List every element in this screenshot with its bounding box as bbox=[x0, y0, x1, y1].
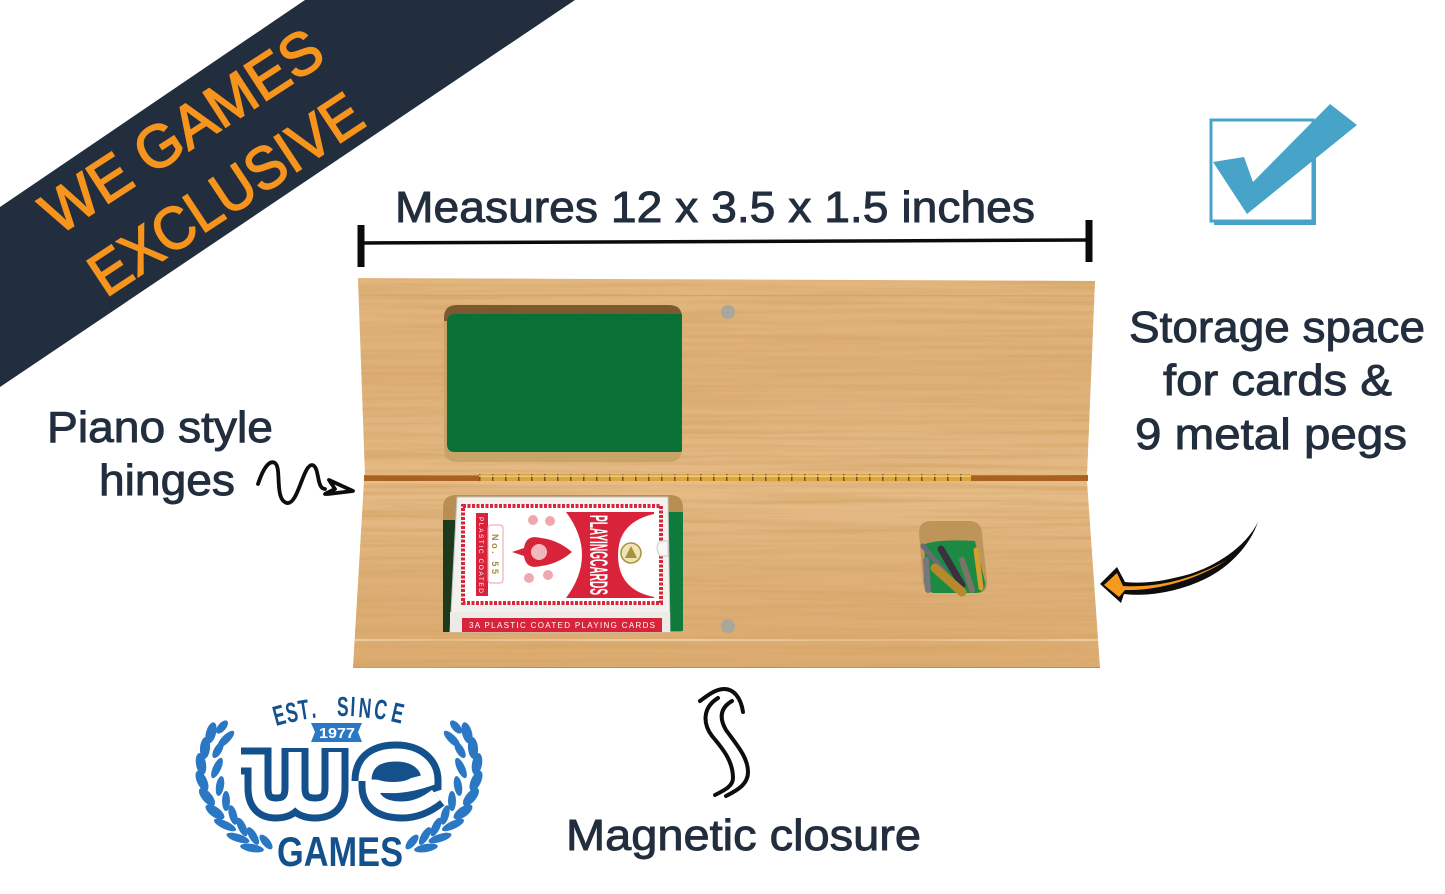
playing cards deck: 3A PLASTIC COATED PLAYING CARDS bbox=[469, 621, 655, 630]
logo arc text: . bbox=[309, 692, 317, 724]
arrow: orange curved to peg storage bbox=[1100, 522, 1258, 603]
logo arc text: E bbox=[269, 699, 289, 732]
arrow: magnetic closure squiggle bbox=[700, 689, 748, 796]
label: storage space: Storage space bbox=[1129, 303, 1425, 352]
arrow: squiggle to hinge bbox=[258, 462, 353, 503]
label: storage space: for cards & bbox=[1163, 356, 1392, 405]
dimension line bbox=[361, 220, 1089, 267]
laurel right bbox=[403, 718, 485, 854]
logo arc text: T bbox=[296, 693, 311, 726]
playing cards deck: PLAYINGCARDS bbox=[584, 515, 612, 595]
label: storage space: 9 metal pegs bbox=[1135, 410, 1407, 459]
1977 ribbon: 1977 bbox=[319, 725, 355, 742]
playing cards deck: No. 55 bbox=[490, 534, 500, 574]
logo arc text: N bbox=[357, 692, 373, 724]
peg recess bbox=[919, 521, 987, 593]
banner: WE Games Exclusive: WE GAMES bbox=[29, 15, 335, 247]
logo arc text: C bbox=[372, 693, 389, 726]
dimension heading: Measures 12 x 3.5 x 1.5 inches bbox=[395, 183, 1035, 232]
logo arc text: I bbox=[350, 691, 356, 722]
label: storage space bbox=[1129, 303, 1425, 459]
label: piano style hinges: hinges bbox=[99, 456, 235, 505]
label: piano style hinges: Piano style bbox=[47, 403, 273, 452]
label: piano style hinges bbox=[47, 403, 273, 505]
playing cards deck bbox=[450, 497, 670, 632]
card recess bbox=[443, 495, 683, 632]
magnet lid bbox=[721, 305, 735, 319]
banner: WE Games Exclusive: EXCLUSIVE bbox=[76, 80, 375, 309]
box base bbox=[353, 481, 1100, 668]
laurel left bbox=[193, 718, 275, 854]
hinge bbox=[364, 474, 1088, 481]
playing cards deck: PLASTIC COATED bbox=[477, 517, 484, 593]
1977 ribbon bbox=[311, 723, 362, 742]
label: magnetic closure: Magnetic closure bbox=[566, 811, 921, 860]
icon: blue check mark in box bbox=[1211, 104, 1357, 225]
logo arc text: E bbox=[389, 696, 407, 729]
logo arc text: S bbox=[283, 696, 301, 729]
logo: WE Games bbox=[193, 691, 485, 875]
cribbage box photo bbox=[350, 275, 1105, 670]
logo arc text: S bbox=[337, 691, 349, 722]
GAMES text: GAMES bbox=[277, 828, 403, 875]
banner: WE Games Exclusive bbox=[0, 0, 575, 387]
wood grain bbox=[350, 275, 1105, 670]
WE monogram bbox=[241, 748, 436, 808]
logo arc text bbox=[269, 691, 407, 732]
box lid bbox=[358, 278, 1095, 476]
magnet base bbox=[721, 619, 735, 633]
lid green felt recess bbox=[444, 305, 682, 462]
